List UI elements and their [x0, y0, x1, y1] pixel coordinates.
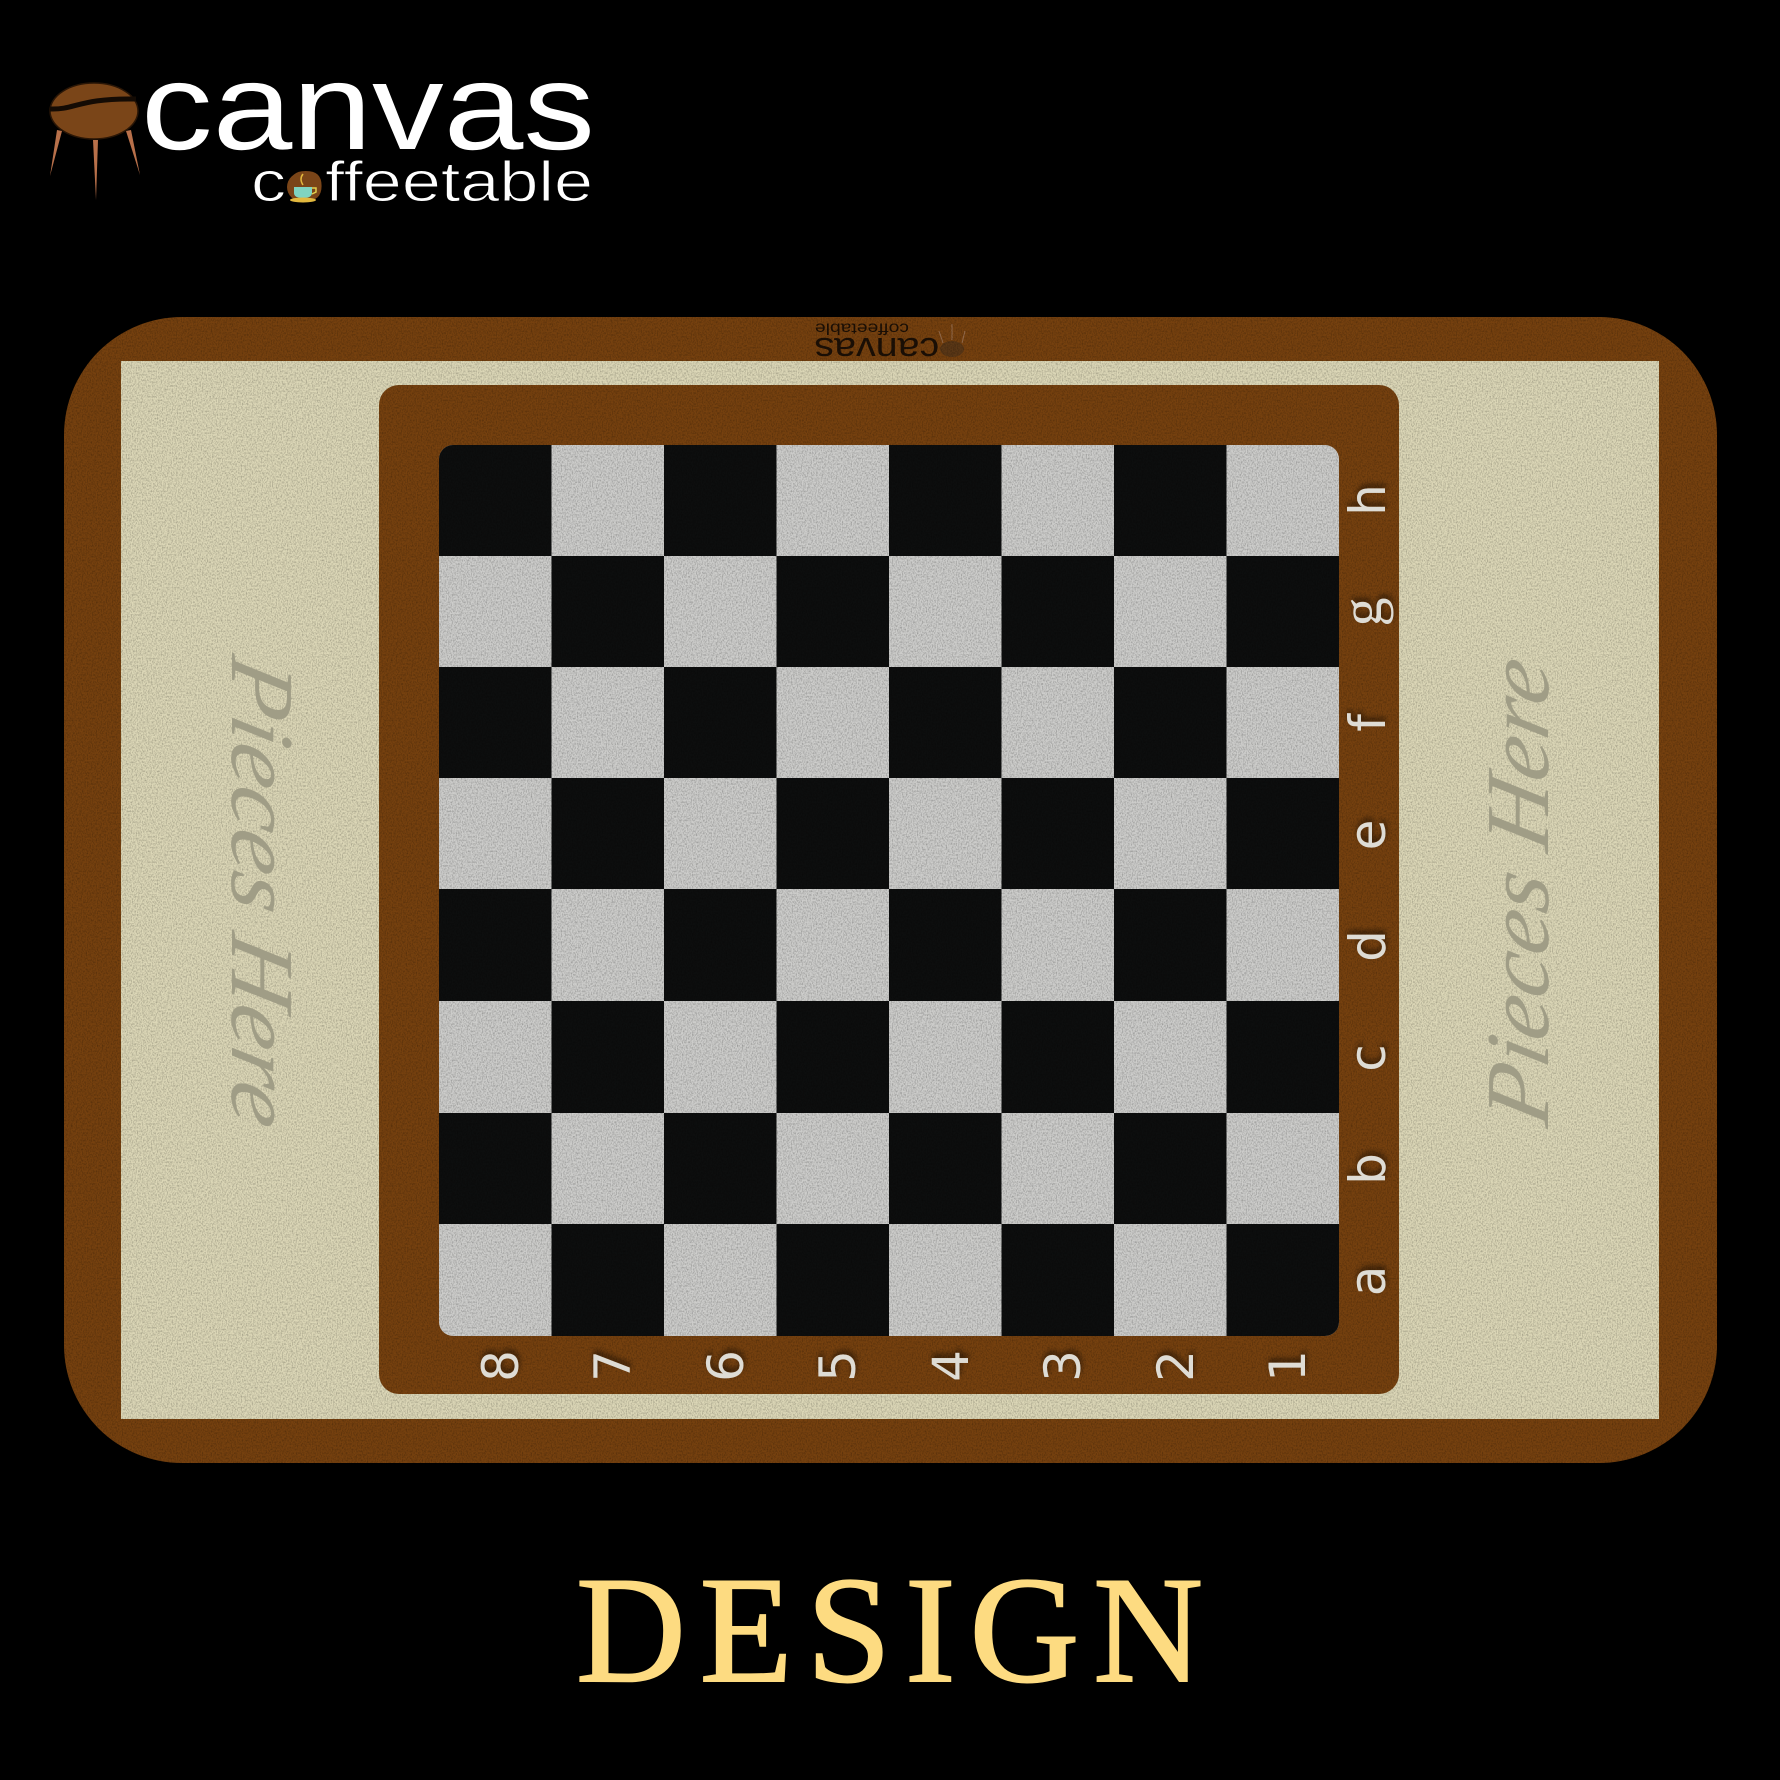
mat border — [64, 317, 1717, 1463]
right script label: Pieces Here — [1468, 648, 1568, 1134]
rank labels 1-8: 4 — [922, 1350, 980, 1382]
board frame — [379, 385, 1399, 1394]
file labels a-h: g — [1329, 598, 1394, 626]
file labels a-h: d — [1339, 930, 1397, 962]
icon: coffee cup — [287, 172, 319, 202]
rank labels 1-8: 2 — [1147, 1350, 1205, 1382]
rank labels 1-8 — [472, 1350, 1317, 1382]
fabric texture — [64, 317, 1717, 1463]
inverted bean table — [939, 324, 965, 357]
file labels a-h: a — [1339, 1266, 1397, 1296]
file labels a-h: c — [1339, 1044, 1397, 1072]
logo wordmark: coffeetable: coffeetable — [251, 150, 593, 214]
rank labels 1-8: 7 — [584, 1350, 642, 1382]
chess board — [439, 445, 1339, 1336]
inverted wordmarks: coffeetable — [815, 320, 909, 337]
icon: coffee bean table — [50, 83, 140, 200]
logo wordmark: canvas: canvas — [141, 39, 595, 176]
inverted wordmarks — [814, 320, 939, 368]
title: DESIGN — [576, 1546, 1203, 1714]
rank labels 1-8: 6 — [697, 1350, 755, 1382]
file labels a-h: b — [1339, 1153, 1397, 1185]
left script label: Pieces Here — [212, 648, 312, 1138]
rank labels 1-8: 1 — [1259, 1350, 1317, 1382]
rank labels 1-8: 3 — [1034, 1350, 1092, 1382]
inverted wordmarks: canvas — [814, 330, 939, 368]
panel: play mat — [64, 317, 1717, 1463]
file labels a-h: f — [1339, 713, 1397, 732]
small inverted logo — [814, 320, 965, 368]
file labels a-h: h — [1339, 484, 1397, 516]
file labels a-h: e — [1339, 820, 1397, 850]
rank labels 1-8: 5 — [809, 1350, 867, 1382]
cream field — [121, 361, 1659, 1419]
file labels a-h — [1329, 484, 1397, 1296]
logo: canvas coffeetable — [50, 39, 595, 214]
rank labels 1-8: 8 — [472, 1350, 530, 1382]
